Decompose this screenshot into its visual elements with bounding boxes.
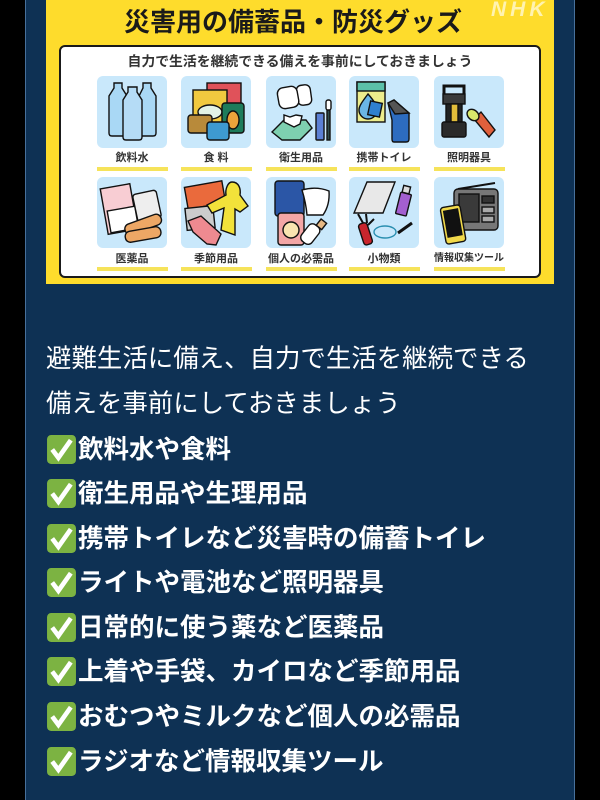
underline [266, 267, 337, 271]
panel: yellow poster [46, 0, 554, 284]
poster title: 災害用の備蓄品・防災グッズ [124, 7, 462, 37]
checklist item 1: 飲料水や食料 [78, 436, 231, 464]
card subtitle: 自力で生活を継続できる備えを事前にしておきましょう [128, 53, 472, 69]
underline [434, 267, 505, 271]
underline [97, 167, 168, 171]
icon: diapers, milk, baby bottle [266, 177, 336, 248]
label: 小物類 [368, 253, 400, 265]
item: portable toilet [349, 76, 420, 171]
item: personal necessities [266, 177, 337, 271]
underline [97, 267, 168, 271]
item: small items [349, 177, 420, 271]
underline [266, 167, 337, 171]
item: hygiene [266, 76, 337, 171]
label: 食 料 [203, 152, 229, 164]
checklist item 6: 上着や手袋、カイロなど季節用品 [78, 658, 461, 686]
underline [349, 167, 420, 171]
icon: newspaper, lighter, knife [349, 177, 419, 248]
icon: radio and smartphone [434, 177, 504, 248]
icon: food packs and cans [181, 76, 251, 148]
label: 衛生用品 [279, 152, 323, 164]
icon: toilet pack and bag [349, 76, 419, 148]
checklist item 7: おむつやミルクなど個人の必需品 [78, 703, 461, 731]
underline [349, 267, 420, 271]
item: information tools [434, 177, 505, 271]
item: seasonal [181, 177, 252, 271]
item: drinking water [97, 76, 168, 171]
label: 携帯トイレ [356, 152, 412, 164]
checklist [47, 435, 486, 776]
icon: tissue, toothbrush [266, 76, 336, 148]
underline [181, 167, 252, 171]
icon: medicine notebook, plasters [97, 177, 167, 248]
underline [434, 167, 505, 171]
checklist item 8: ラジオなど情報収集ツール [78, 748, 384, 776]
label: 飲料水 [116, 152, 148, 164]
checklist item 4: ライトや電池など照明器具 [78, 569, 384, 597]
label: 照明器具 [447, 152, 491, 164]
label: 季節用品 [194, 253, 238, 265]
item: food [181, 76, 252, 171]
icon: raincoat, gloves, warmer [181, 177, 251, 248]
intro text: 避難生活に備え、自力で生活を継続できる [46, 345, 529, 373]
intro text: 備えを事前にしておきましょう [46, 390, 401, 418]
checklist item 2: 衛生用品や生理用品 [78, 480, 308, 508]
panel: white card [59, 45, 541, 278]
item: medicine [97, 177, 168, 271]
checklist item 3: 携帯トイレなど災害時の備蓄トイレ [78, 525, 486, 553]
underline [181, 267, 252, 271]
icon: water bottles [97, 76, 167, 148]
checklist item 5: 日常的に使う薬など医薬品 [78, 614, 384, 642]
label: 情報収集ツール [434, 253, 504, 264]
item: lighting [434, 76, 505, 171]
label: 個人の必需品 [268, 253, 334, 265]
intro text [46, 345, 529, 418]
label: 医薬品 [116, 253, 148, 265]
icon: lantern and flashlight [434, 76, 504, 148]
